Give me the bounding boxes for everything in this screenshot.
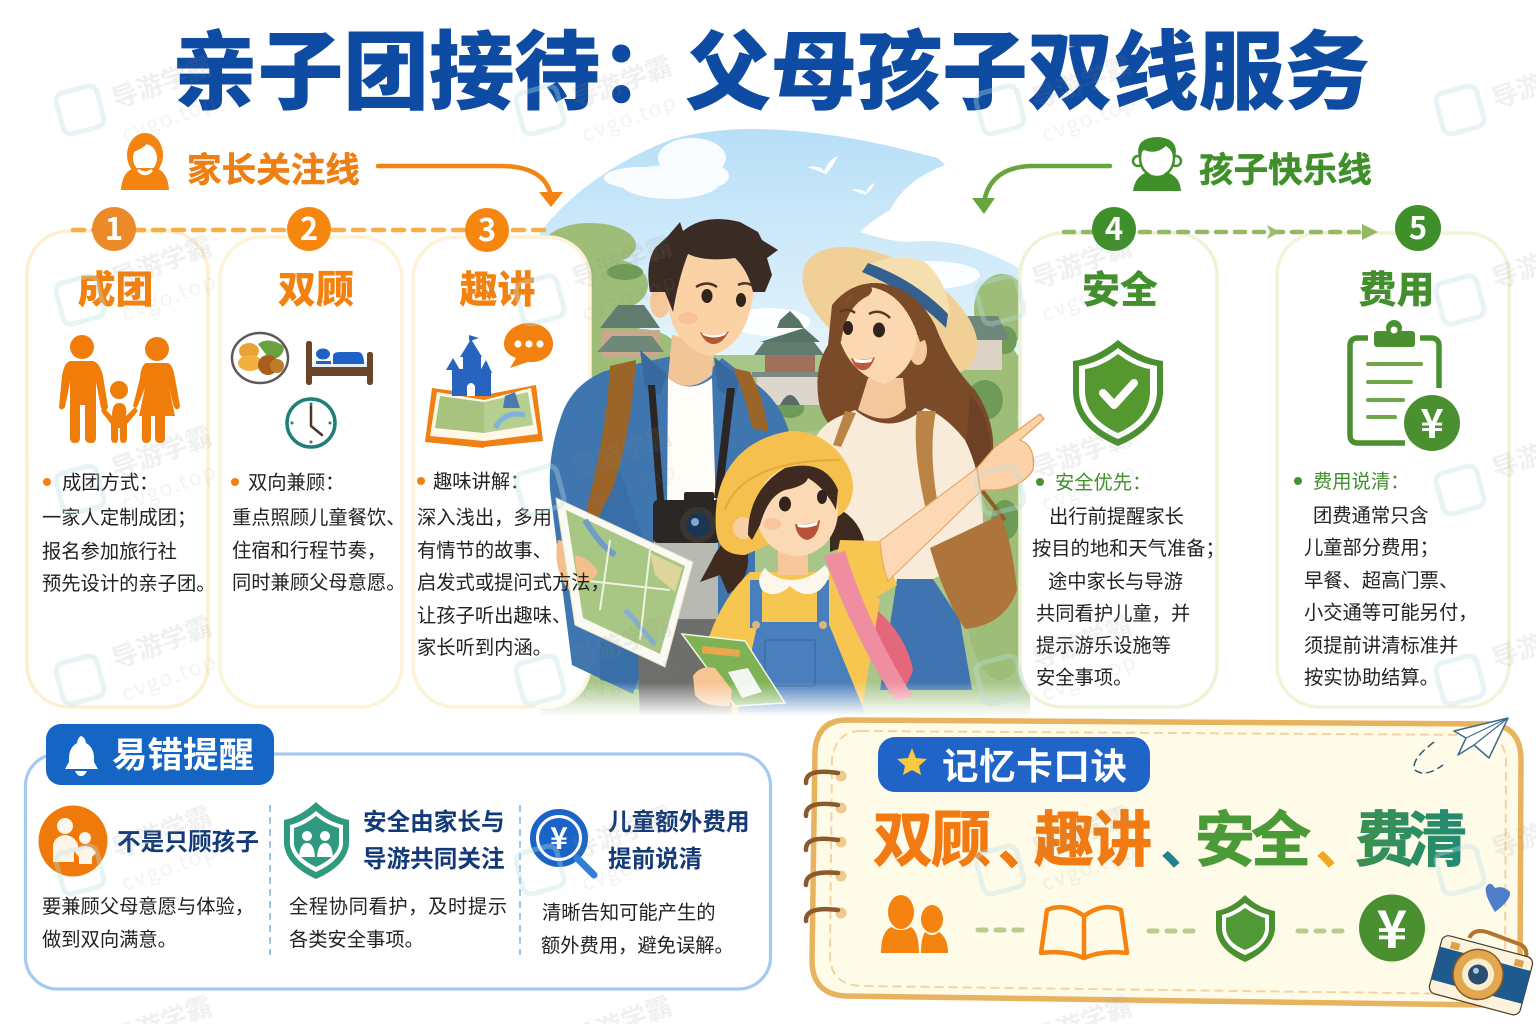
text: 导游学霸 [1026, 796, 1137, 866]
icon: camera [1428, 921, 1536, 1016]
slogan: 、 [998, 801, 1052, 880]
mistake 2 heading [363, 803, 505, 874]
step badge 1 [92, 204, 136, 251]
right pagoda [964, 316, 1010, 370]
text: 趣味讲解: 有情节的故事、 [417, 535, 552, 563]
pigtails [700, 530, 748, 594]
icon: heart [1486, 884, 1510, 912]
icon: people [881, 895, 948, 953]
camera [653, 492, 721, 543]
text: 费用说清: 按实协助结算。 [1304, 662, 1439, 690]
map [556, 498, 693, 667]
mistake 3 heading [608, 803, 750, 874]
step badge 1: 1 [105, 204, 123, 249]
panel: common mistakes [26, 724, 770, 989]
text: 导游学霸 [566, 606, 677, 676]
step badge 5 [1395, 203, 1441, 251]
shoulder bag [930, 515, 1017, 629]
text: 趣味讲解: 启发式或提问式方法， [417, 567, 610, 595]
step badge 2 [287, 204, 331, 251]
text: cvgo.top [577, 265, 681, 328]
text: cvgo.top [1037, 455, 1141, 518]
illustration: father [550, 219, 790, 725]
text: 费用说清: 团费通常只含 [1313, 500, 1429, 528]
text: 费用说清: 须提前讲清标准并 [1304, 630, 1458, 658]
text: 安全优先: 按目的地和天气准备； [1032, 533, 1225, 561]
slogan: 双顾 [873, 792, 991, 879]
holding hand [693, 667, 732, 706]
text: 导游学霸 [1026, 606, 1137, 676]
white cloud bank, upper right [860, 160, 1030, 268]
mistake 3 text [541, 897, 734, 958]
heading: 成团: 成团 [77, 259, 154, 314]
icon: shield with check [1073, 340, 1163, 446]
slogan [873, 792, 1467, 880]
mistake 3 text: 额外费用，避免误解。 [541, 930, 734, 958]
illustration: child [682, 414, 1044, 725]
text: 导游学霸 [566, 416, 677, 486]
text: cvgo.top [1037, 645, 1141, 708]
icon: paper plane [1454, 718, 1508, 758]
backpack strap [824, 551, 913, 700]
icon: bed [306, 341, 373, 385]
overalls [735, 622, 870, 725]
icon: clock [287, 399, 335, 447]
icon: family [59, 335, 180, 443]
icon: magnifier with yen: ¥ [550, 814, 568, 858]
text: 费用说清: 小交通等可能另付， [1304, 597, 1478, 625]
step badge 2: 2 [300, 204, 318, 249]
hat [716, 431, 853, 555]
text: 双向兼顾: 住宿和行程节奏， [232, 535, 386, 563]
text: 费用说清: 儿童部分费用； [1304, 532, 1439, 560]
text: cvgo.top [117, 835, 221, 898]
text: 导游学霸 [1026, 416, 1137, 486]
panel: step 3 card [413, 237, 590, 707]
tab: 记忆卡口诀: 记忆卡口诀 [942, 737, 1127, 790]
text: cvgo.top [1037, 835, 1141, 898]
hand [556, 540, 600, 601]
arrow: child line [972, 166, 1110, 214]
icon: food plate [232, 333, 288, 383]
mistake 2 text: 全程协同看护，及时提示 [289, 891, 507, 919]
text: 双向兼顾: 重点照顾儿童餐饮、 [232, 502, 406, 530]
slogan: 、 [1160, 801, 1214, 880]
guidebook [682, 634, 785, 706]
icon: parent and child [38, 806, 108, 876]
heading: 费用: 费用 [1358, 259, 1435, 314]
green dashed connector with arrows [1064, 224, 1378, 240]
text: 安全优先: 出行前提醒家长 [1049, 501, 1184, 529]
text: cvgo.top [1037, 265, 1141, 328]
tab: 易错提醒 [46, 724, 274, 785]
text: 趣味讲解 [417, 466, 610, 660]
heading: parent line: 家长关注线 [187, 142, 360, 192]
text: 安全优先: 安全优先： [1055, 467, 1151, 495]
icon: clipboard with yen [1350, 320, 1460, 451]
text: cvgo.top [117, 265, 221, 328]
text: 费用说清 [1294, 466, 1478, 690]
icon: shield with people [284, 802, 349, 879]
icon: child [1133, 137, 1181, 191]
mistake 1 heading: 不是只顾孩子 [117, 823, 259, 857]
mistake 1 text [42, 891, 254, 952]
text: 安全优先 [1032, 467, 1225, 690]
text: 趣味讲解: 让孩子听出趣味、 [417, 600, 571, 628]
panel: step 1 card [27, 231, 208, 707]
step badge 4: 4 [1105, 204, 1123, 249]
text: 导游学霸 [106, 416, 217, 486]
text: 成团方式: 成团方式： [62, 467, 158, 495]
text: 安全优先: 途中家长与导游 [1048, 566, 1183, 594]
panel: memory card [806, 718, 1536, 1016]
text: 趣味讲解: 深入浅出，多用 [417, 502, 552, 530]
tab: 易错提醒: 易错提醒 [112, 727, 254, 778]
text: 导游学霸 [1026, 226, 1137, 296]
text: cvgo.top [117, 86, 221, 149]
text: 成团方式 [42, 467, 216, 596]
shirt [708, 572, 880, 720]
icon: yen coin: ¥ [1377, 888, 1407, 963]
tab: 记忆卡口诀 [878, 737, 1150, 792]
text: cvgo.top [577, 645, 681, 708]
pointing arm and hand [880, 468, 982, 581]
text: 双向兼顾: 双向兼顾： [248, 467, 344, 495]
heading: child line: 孩子快乐线 [1199, 142, 1372, 192]
text: 导游学霸 [566, 46, 677, 116]
mistake 1 text: 要兼顾父母意愿与体验， [42, 891, 254, 919]
text: 成团方式: 一家人定制成团； [42, 502, 196, 530]
text: 成团方式: 报名参加旅行社 [42, 536, 177, 564]
slogan: 安全 [1195, 792, 1311, 879]
text: 趣味讲解: 趣味讲解： [433, 466, 529, 494]
text: 导游学霸 [1026, 46, 1137, 116]
icon: open book [1041, 907, 1127, 958]
mistake 3 text: 清晰告知可能产生的 [542, 897, 716, 925]
speech bubble [504, 323, 553, 368]
mistake 2 heading: 导游共同关注 [363, 840, 505, 874]
icon: yen coin [1359, 888, 1425, 963]
step badge 4 [1092, 204, 1136, 251]
slogan: 趣讲 [1034, 792, 1152, 879]
panel: step 2 card [220, 237, 402, 707]
mistake 3 heading: 儿童额外费用 [608, 803, 750, 837]
text: cvgo.top [577, 86, 681, 149]
text: 安全优先: 共同看护儿童，并 [1036, 598, 1190, 626]
icon: magnifier with yen [533, 812, 594, 875]
text: 导游学霸 [106, 606, 217, 676]
mistake 3 heading: 提前说清 [608, 840, 702, 874]
step badge 5: 5 [1409, 203, 1427, 248]
clouds [604, 138, 980, 336]
mistake 2 text [289, 891, 507, 952]
icon: shield [1216, 895, 1275, 962]
text: 导游学霸 [106, 226, 217, 296]
text: 安全优先: 提示游乐设施等 [1036, 630, 1171, 658]
text: cvgo.top [117, 645, 221, 708]
illustration: mother [781, 220, 1017, 690]
step badge 3: 3 [478, 205, 496, 250]
text: 费用说清: 费用说清： [1313, 466, 1409, 494]
neck and collar [778, 550, 808, 575]
text: 安全优先: 安全事项。 [1036, 662, 1132, 690]
spiral rings [806, 770, 846, 921]
step badge 3 [465, 205, 509, 252]
mistake 1 text: 做到双向满意。 [42, 924, 177, 952]
mistake 2 heading: 安全由家长与 [363, 803, 505, 837]
icon: clipboard with yen: ¥ [1420, 392, 1444, 450]
castle [446, 339, 492, 396]
orange dashed connector [73, 228, 550, 232]
slogan: 费清 [1355, 792, 1467, 879]
text: cvgo.top [117, 455, 221, 518]
text: 费用说清: 早餐、超高门票、 [1304, 565, 1458, 593]
icon: storybook with castle [425, 323, 553, 448]
icon: parent [121, 133, 169, 190]
text: cvgo.top [1037, 86, 1141, 149]
slogan: 、 [1315, 801, 1369, 880]
mistake 2 text: 各类安全事项。 [289, 924, 424, 952]
illustration: bottom fade [535, 682, 1035, 728]
text: cvgo.top [577, 455, 681, 518]
text: 成团方式: 预先设计的亲子团。 [42, 568, 216, 596]
heading: 双顾: 双顾 [278, 259, 354, 314]
text: 导游学霸 [566, 226, 677, 296]
panel: step 4 card [1020, 233, 1217, 707]
text: 双向兼顾: 同时兼顾父母意愿。 [232, 567, 406, 595]
heading: 安全: 安全 [1082, 259, 1158, 314]
text: 趣味讲解: 家长听到内涵。 [417, 632, 552, 660]
backpack [867, 602, 913, 694]
text: 双向兼顾 [231, 467, 406, 595]
text: cvgo.top [577, 835, 681, 898]
left pagoda [597, 305, 664, 358]
center pagoda [752, 311, 826, 405]
panel: step 5 card [1277, 233, 1509, 707]
illustration background: sky, trees and pagodas [540, 120, 1034, 725]
text: 导游学霸 [106, 796, 217, 866]
birds [807, 156, 875, 195]
heading: 趣讲: 趣讲 [459, 259, 536, 314]
text: 导游学霸 [566, 796, 677, 866]
text: 导游学霸 [106, 46, 217, 116]
foliage [540, 355, 1030, 725]
title: 亲子团接待：父母孩子双线服务 [172, 2, 1370, 127]
head [733, 517, 753, 539]
arrow: parent line [378, 166, 563, 207]
